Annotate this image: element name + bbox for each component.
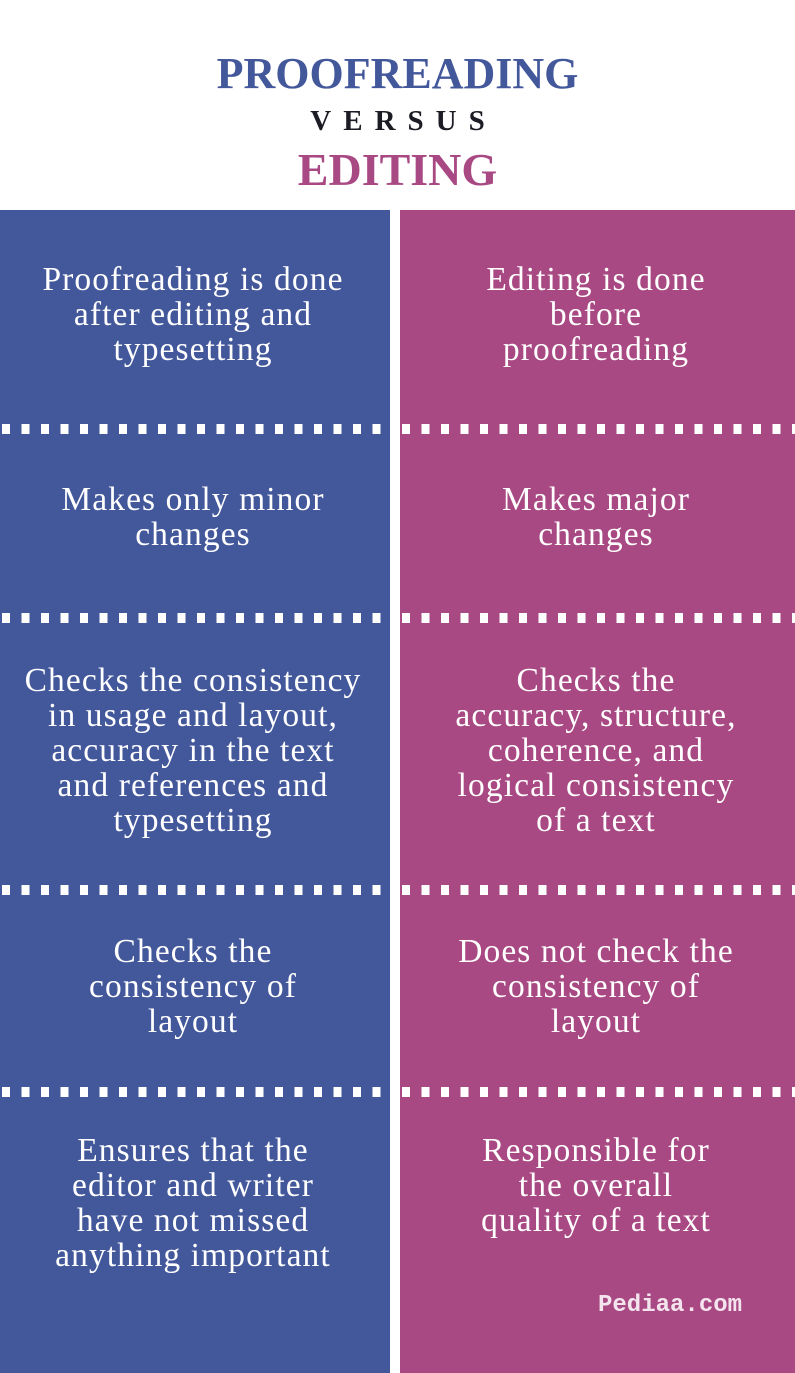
title — [217, 49, 578, 195]
panel: proofreading — [0, 210, 390, 1373]
text: editing row 2: changes — [538, 516, 654, 553]
text: proofreading row 3: and references and — [58, 767, 328, 804]
divider rows — [2, 424, 795, 1097]
title: PROOFREADING — [217, 49, 578, 98]
title: EDITING — [298, 144, 497, 195]
title: VERSUS — [310, 105, 497, 137]
text: proofreading row 4: consistency of — [89, 968, 297, 1005]
text: editing row 3: of a text — [536, 802, 656, 839]
text: editing row 4: Does not check the — [458, 933, 734, 970]
text: proofreading row 5: anything important — [55, 1237, 331, 1274]
text: proofreading row 1: after editing and — [74, 296, 312, 333]
text: proofreading row 4: layout — [148, 1003, 238, 1040]
text: editing row 3: coherence, and — [488, 732, 704, 769]
text: proofreading row 3: in usage and layout, — [48, 697, 338, 734]
text: proofreading row 2 — [61, 481, 325, 553]
text: proofreading row 2: Makes only minor — [61, 481, 325, 518]
text: proofreading row 4 — [89, 933, 297, 1040]
text: proofreading row 1: Proofreading is done — [42, 261, 344, 298]
text: proofreading row 5: editor and writer — [72, 1167, 314, 1204]
text: editing row 3: Checks the — [517, 662, 675, 699]
text: proofreading row 3: accuracy in the text — [51, 732, 335, 769]
text: editing row 4: consistency of — [492, 968, 700, 1005]
text: editing row 4 — [458, 933, 734, 1040]
text: proofreading row 3: typesetting — [113, 802, 273, 839]
text: proofreading row 5: have not missed — [77, 1202, 309, 1239]
text: editing row 5: Responsible for — [482, 1132, 710, 1169]
panel: editing — [400, 210, 795, 1373]
text: editing row 4: layout — [551, 1003, 641, 1040]
logo: Pediaa.com: Pediaa.com — [598, 1292, 742, 1319]
text: editing row 3: logical consistency — [458, 767, 734, 804]
text: editing row 1 — [486, 261, 706, 368]
text: proofreading row 2: changes — [135, 516, 251, 553]
text: proofreading row 5 — [55, 1132, 331, 1274]
text: proofreading row 3 — [25, 662, 361, 839]
text: proofreading row 3: Checks the consistency — [25, 662, 361, 699]
text: editing row 2: Makes major — [502, 481, 690, 518]
text: proofreading row 1: typesetting — [113, 331, 273, 368]
text: editing row 5 — [481, 1132, 711, 1239]
text: editing row 1: Editing is done — [486, 261, 706, 298]
text: editing row 2 — [502, 481, 690, 553]
text: proofreading row 4: Checks the — [114, 933, 272, 970]
text: editing row 3 — [455, 662, 737, 839]
text: editing row 1: proofreading — [503, 331, 689, 368]
text: proofreading row 5: Ensures that the — [77, 1132, 309, 1169]
text: editing row 3: accuracy, structure, — [455, 697, 737, 734]
text: editing row 5: quality of a text — [481, 1202, 711, 1239]
text: editing row 1: before — [550, 296, 642, 333]
text: editing row 5: the overall — [519, 1167, 673, 1204]
text: proofreading row 1 — [42, 261, 344, 368]
